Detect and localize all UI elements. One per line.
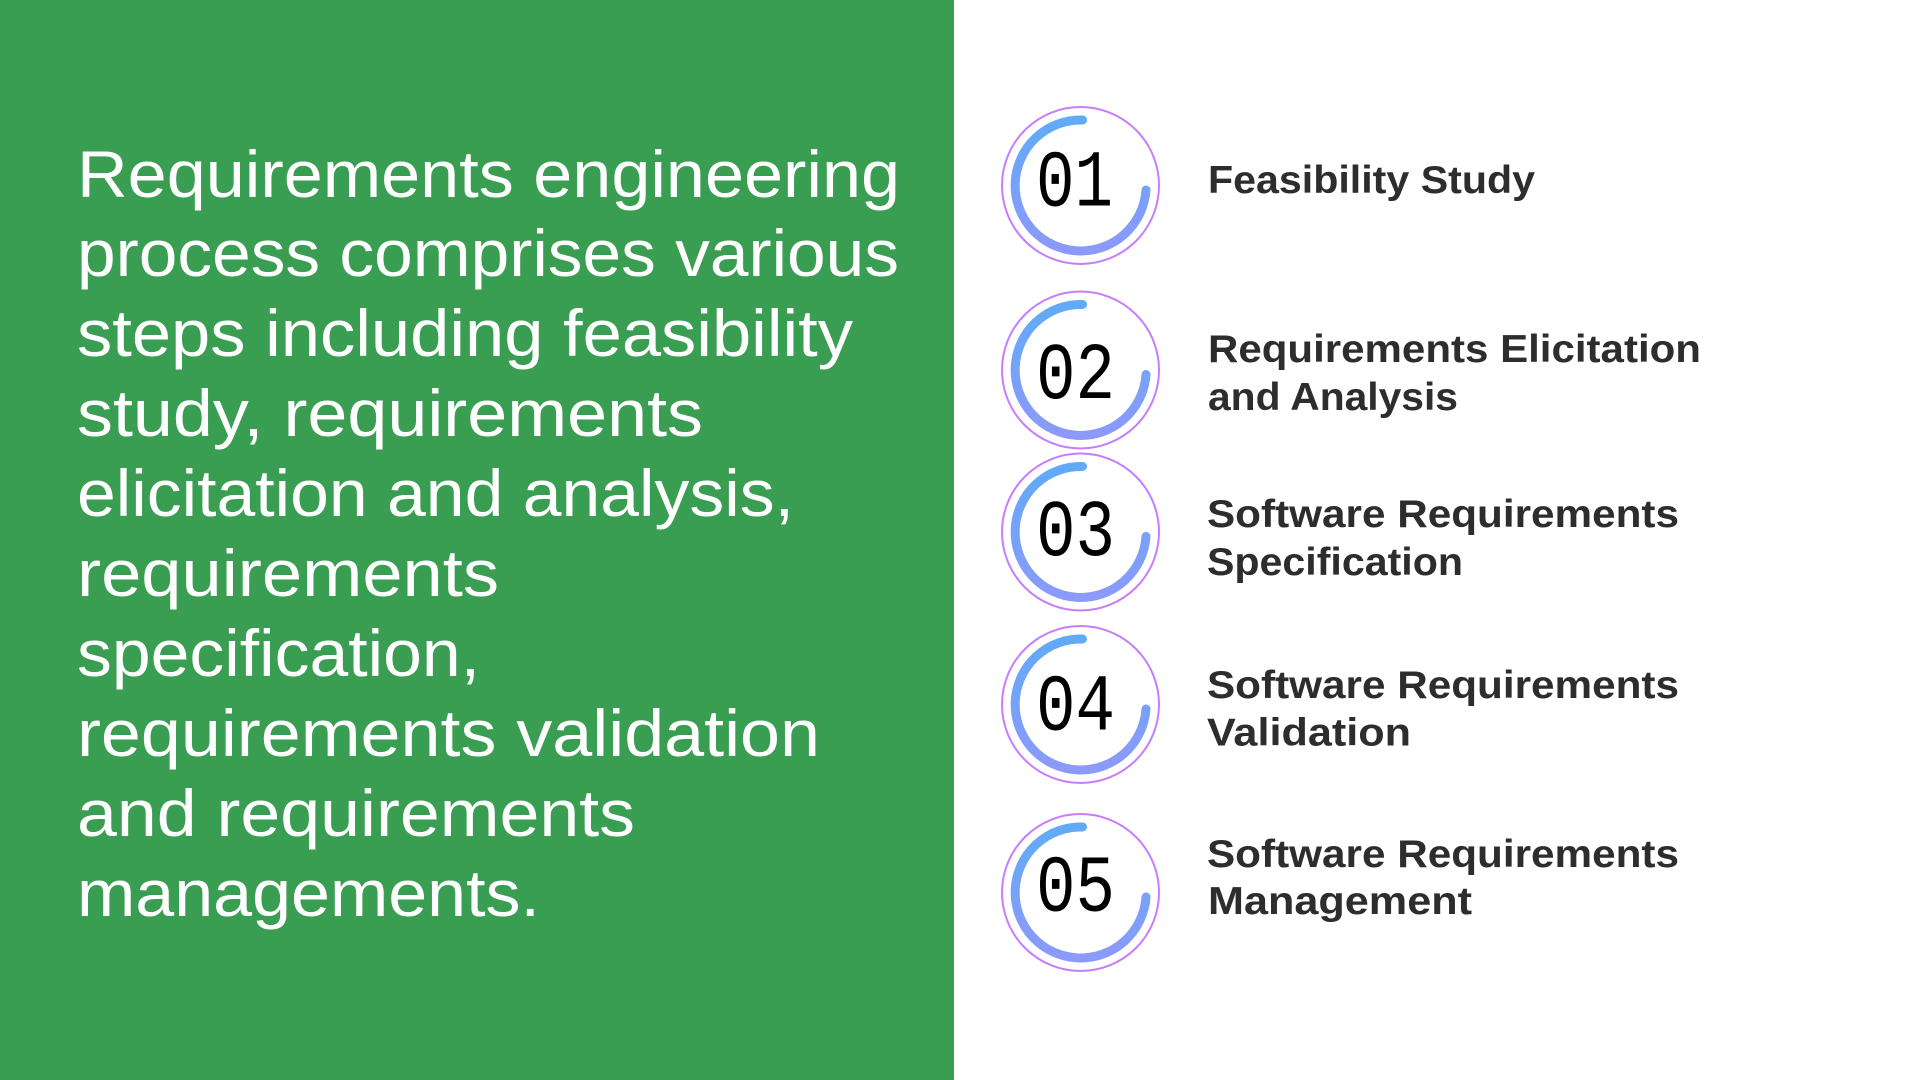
icon: number badge 05: 05 [1036, 844, 1115, 936]
step 2 [1002, 292, 1701, 448]
label: step 2: and Analysis [1208, 376, 1458, 419]
text block: process summary: managements. [77, 856, 540, 930]
panel: green summary [0, 0, 954, 1080]
label: step 3 [1207, 493, 1679, 584]
label: step 3: Software Requirements [1207, 493, 1679, 536]
label: step 5: Management [1208, 880, 1472, 923]
text block: process summary: requirements validation [77, 696, 820, 770]
step 5 [1002, 814, 1679, 971]
icon: number badge 04 [1002, 626, 1159, 783]
text block: process summary: Requirements engineering [77, 137, 900, 211]
text block: process summary: study, requirements [77, 376, 703, 450]
step 3 [1002, 454, 1679, 610]
label: step 1: Feasibility Study [1208, 159, 1535, 202]
step 1 [1002, 107, 1535, 264]
icon: number badge 01: 01 [1036, 140, 1113, 230]
text block: process summary [77, 137, 900, 930]
step 4 [1002, 626, 1679, 783]
icon: number badge 01 [1002, 107, 1159, 264]
label: step 4: Validation [1207, 712, 1411, 754]
icon: number badge 05 [1002, 814, 1159, 971]
text block: process summary: and requirements [77, 776, 635, 850]
text block: process summary: requirements [77, 536, 499, 610]
label: step 5: Software Requirements [1207, 833, 1679, 876]
label: step 4 [1207, 664, 1679, 754]
icon: number badge 02: 02 [1036, 332, 1115, 423]
label: step 2: Requirements Elicitation [1208, 328, 1701, 371]
text block: process summary: specification, [77, 616, 480, 690]
icon: number badge 03: 03 [1036, 489, 1115, 580]
text block: process summary: process comprises various [77, 216, 899, 290]
text block: process summary: steps including feasibility [77, 296, 853, 370]
icon: number badge 04: 04 [1036, 664, 1115, 754]
label: step 3: Specification [1207, 541, 1463, 584]
label: step 5 [1207, 833, 1679, 923]
label: step 2 [1208, 328, 1701, 419]
icon: number badge 03 [1002, 454, 1159, 610]
text block: process summary: elicitation and analysis, [77, 456, 794, 530]
icon: number badge 02 [1002, 292, 1159, 448]
label: step 4: Software Requirements [1207, 664, 1679, 707]
